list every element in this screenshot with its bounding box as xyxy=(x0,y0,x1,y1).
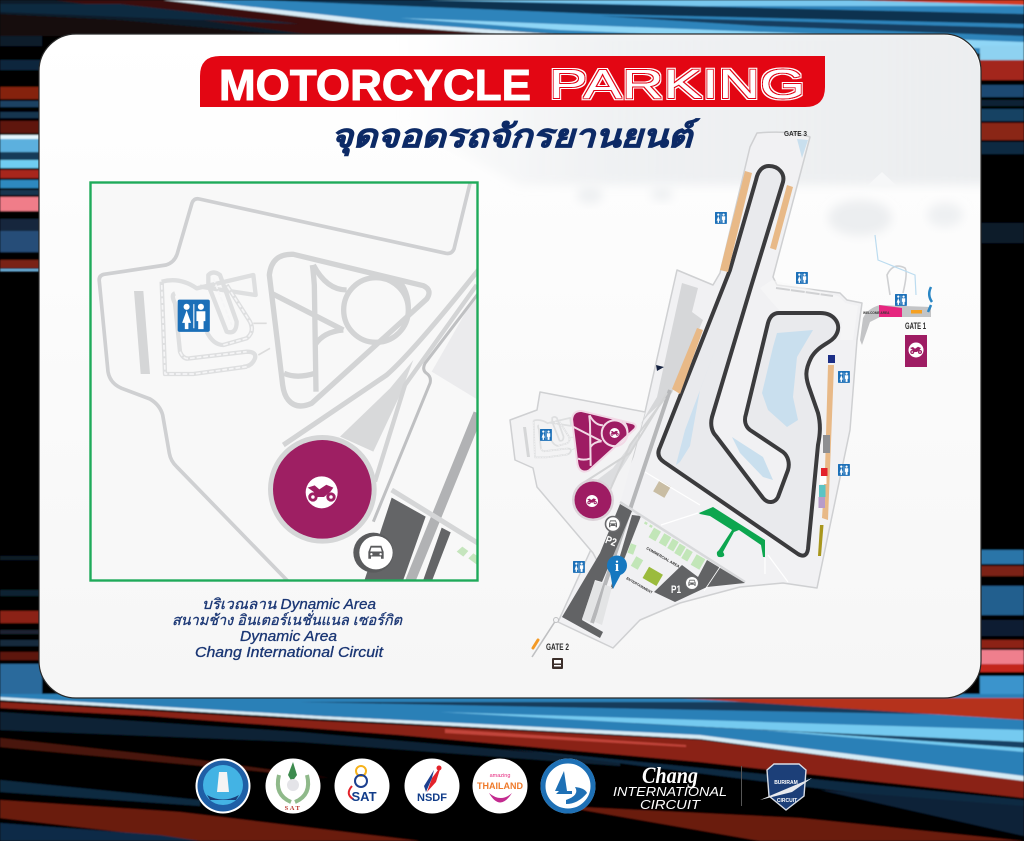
title banner: Motorcycle Parking xyxy=(200,56,825,110)
white paths xyxy=(645,472,788,582)
welcome area road xyxy=(860,305,931,345)
Gate 2 road xyxy=(532,618,558,657)
access roads xyxy=(283,270,478,522)
faint race photo backdrop xyxy=(518,35,980,236)
label: P2: P2 xyxy=(604,534,618,549)
label: Gate 3: GATE 3 xyxy=(784,129,807,138)
grey bar xyxy=(134,291,150,374)
logo: Amazing Thailand: THAILAND xyxy=(477,781,523,791)
P2 car park xyxy=(562,504,641,638)
panel: inset zoom map of Dynamic Area xyxy=(90,182,478,582)
entertainment zone block xyxy=(643,567,663,586)
label: Welcome Area: WELCOME AREA xyxy=(863,311,890,315)
green grandstand xyxy=(699,507,765,557)
logo: Chang International Circuit: CIRCUIT xyxy=(640,797,701,812)
top-right service roads xyxy=(776,235,916,296)
logo: Buriram Circuit shield xyxy=(760,764,812,810)
car parking icon xyxy=(353,533,393,573)
label: Gate 1: GATE 1 xyxy=(905,321,926,331)
grey service area xyxy=(640,283,703,425)
logo: NSDF: NSDF xyxy=(417,792,447,804)
tan building xyxy=(653,480,671,498)
Thai subtitle: จุดจอดรถจักรยานยนต์ xyxy=(331,118,700,156)
logo: SAT Sports Authority: SAT xyxy=(351,789,377,804)
commercial area blocks xyxy=(627,521,705,570)
figure-eight driving track xyxy=(269,254,429,406)
label: Entertainment Zone: ENTERTAINMENT xyxy=(626,576,654,595)
caption: Dynamic Area location xyxy=(172,597,404,661)
caption: Dynamic Area location: Dynamic Area xyxy=(240,629,337,645)
parking and central road xyxy=(364,413,478,582)
icon: motorcycle parking at Gate 1 xyxy=(905,335,927,367)
logo: Amazing Thailand xyxy=(472,758,528,814)
Dynamic Area outline xyxy=(510,392,645,570)
motorcycle parking circle xyxy=(268,435,377,544)
lakes xyxy=(676,330,813,480)
small marker flag xyxy=(656,365,664,371)
heading: PARKING: PARKING xyxy=(549,61,805,107)
logo: Chang International Circuit: INTERNATIONAL xyxy=(613,784,727,799)
Gate 3 water patch xyxy=(797,139,808,158)
white band around track xyxy=(760,280,858,340)
coloured pit blocks xyxy=(818,355,835,556)
motorcycle parking circle xyxy=(572,479,614,521)
logo: Buriram Circuit shield: CIRCUIT xyxy=(777,798,797,804)
white map card xyxy=(39,30,990,698)
main circuit map xyxy=(510,129,932,669)
caption: Dynamic Area location: Chang International Circuit xyxy=(195,645,384,661)
grandstands xyxy=(672,171,834,520)
label: Gate 2: GATE 2 xyxy=(546,642,569,652)
caption: Dynamic Area location: บริเวณลาน Dynamic Area xyxy=(202,597,376,613)
icon: information pin: i xyxy=(615,559,619,575)
area background right xyxy=(432,290,478,400)
race track xyxy=(658,166,838,556)
P1 car park xyxy=(654,560,745,602)
label: P1: P1 xyxy=(671,584,681,596)
icon: car P2 xyxy=(606,516,620,532)
miniature track xyxy=(162,272,270,374)
icon: information pin xyxy=(607,556,627,589)
logo: SAT crest: SAT xyxy=(285,805,301,812)
toilet icons xyxy=(540,212,907,573)
logo: NSDF xyxy=(404,758,460,814)
logo: Chang International Circuit xyxy=(613,763,727,812)
central road xyxy=(592,390,670,623)
caption: Dynamic Area location: สนามช้าง อินเตอร์เนชั่นแนล เซอร์กิต xyxy=(172,610,404,629)
icon: car P1 xyxy=(686,576,698,590)
cross road to commercial area xyxy=(620,502,745,582)
logo: Amazing Thailand: amazing xyxy=(490,773,510,779)
icon: bus xyxy=(552,658,563,669)
logo: SAT crest xyxy=(266,758,320,814)
welcome area block xyxy=(879,305,902,317)
icon: toilets xyxy=(178,300,210,332)
footer logos xyxy=(196,758,812,814)
logo: Chang International Circuit: Chang xyxy=(642,763,698,788)
miniature Dynamic Area: parking xyxy=(523,411,636,472)
heading: MOTORCYCLE: MOTORCYCLE xyxy=(219,61,531,110)
label: Commercial Area: COMMERCIAL AREA xyxy=(646,546,680,569)
logo: SAT Sports Authority xyxy=(334,758,390,814)
divider xyxy=(741,766,742,806)
roads by moto circle xyxy=(580,393,667,490)
circuit grounds outline xyxy=(558,132,862,648)
light strips xyxy=(582,581,612,625)
logo: Tourism Authority of Thailand xyxy=(540,758,596,814)
dynamic area boundary xyxy=(99,183,470,582)
circuit infield xyxy=(658,166,838,556)
logo: Buriram Circuit shield: BURIRAM xyxy=(774,780,798,786)
logo: Ministry of Tourism and Sports xyxy=(196,758,250,814)
